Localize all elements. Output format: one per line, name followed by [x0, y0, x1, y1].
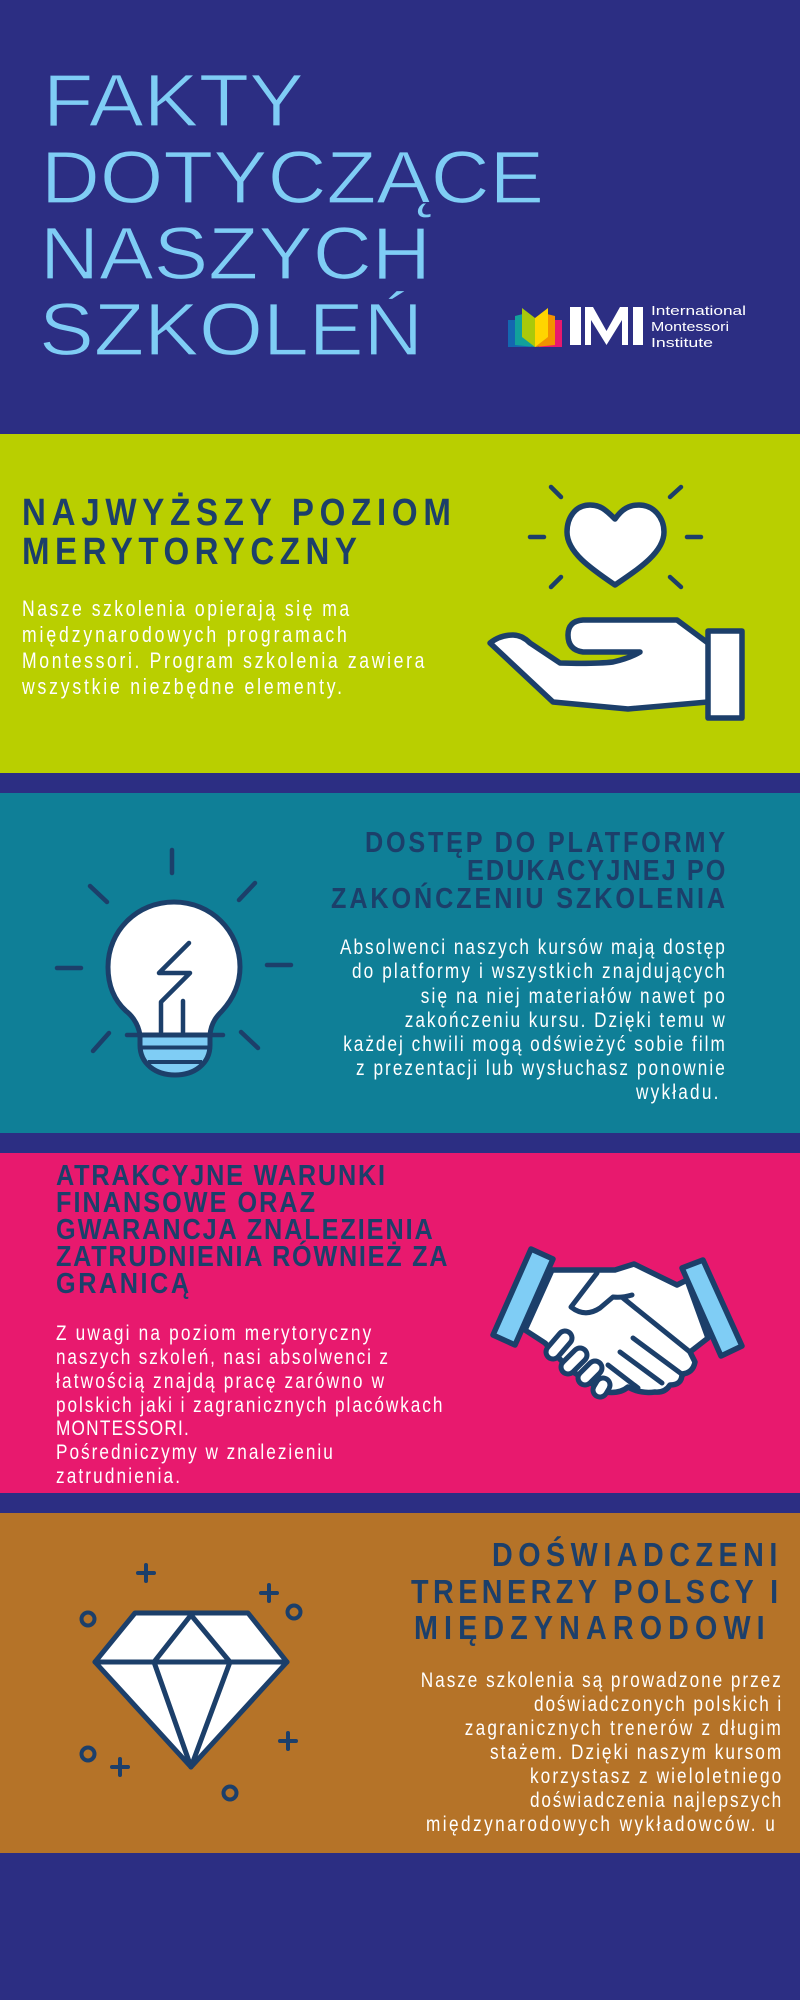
- heading: [331, 825, 725, 914]
- text block: doświadczenia najlepszych: [530, 1788, 781, 1813]
- text block: każdej chwili mogą odświeżyć sobie film: [343, 1032, 725, 1057]
- text block: wszystkie niezbędne elementy.: [21, 675, 342, 700]
- heading: FINANSOWE ORAZ: [56, 1185, 315, 1218]
- logo wordmark IMI: [570, 307, 643, 345]
- heading: ATRAKCYJNE WARUNKI: [56, 1158, 385, 1191]
- text block: MONTESSORI.: [56, 1416, 189, 1441]
- heading: [411, 1535, 778, 1646]
- text block: Pośredniczymy w znalezieniu: [56, 1440, 333, 1465]
- text block: Montessori. Program szkolenia zawiera: [22, 649, 425, 674]
- text block: Z uwagi na poziom merytoryczny: [56, 1321, 371, 1346]
- title: DOTYCZĄCE: [41, 136, 544, 219]
- logo text: [651, 303, 746, 350]
- logo: International Montessori Institute: [508, 303, 746, 350]
- icon: coloured book: [508, 308, 562, 347]
- heading: GWARANCJA ZNALEZIENIA: [56, 1212, 433, 1245]
- heading: EDUKACYJNEJ PO: [467, 853, 725, 886]
- icon: light bulb: [57, 850, 291, 1075]
- text block: łatwością znajdą pracę zarówno w: [56, 1369, 385, 1394]
- heading: NAJWYŻSZY POZIOM: [22, 491, 451, 534]
- logo text: International: [651, 303, 746, 318]
- text block: polskich jaki i zagranicznych placówkach: [56, 1393, 442, 1418]
- text block: wykładu.: [635, 1080, 718, 1105]
- text block: zakończeniu kursu. Dzięki temu w: [405, 1008, 726, 1033]
- panel: najwyższy poziom merytoryczny: [0, 434, 800, 773]
- text block: [340, 935, 726, 1105]
- heading: [56, 1158, 448, 1299]
- panel: doświadczeni trenerzy: [0, 1513, 800, 1853]
- heading: [22, 491, 451, 573]
- fingers: [553, 1338, 603, 1390]
- text block: do platformy i wszystkich znajdujących: [352, 959, 725, 984]
- title: SZKOLEŃ: [39, 288, 423, 371]
- heading: TRENERZY POLSCY I: [411, 1573, 778, 1610]
- text block: [421, 1668, 781, 1837]
- text block: zatrudnienia.: [56, 1464, 180, 1489]
- text block: [56, 1321, 442, 1489]
- text block: zagranicznych trenerów z długim: [465, 1716, 781, 1741]
- text block: Absolwenci naszych kursów mają dostęp: [340, 935, 725, 960]
- text block: stażem. Dzięki naszym kursom: [490, 1740, 781, 1765]
- icon: heart over hand: [490, 487, 742, 718]
- text block: międzynarodowych programach: [22, 623, 347, 648]
- icon: diamond: [82, 1565, 300, 1800]
- heading: ZAKOŃCZENIU SZKOLENIA: [331, 881, 725, 914]
- title: NASZYCH: [40, 212, 431, 295]
- text block: z prezentacji lub wysłuchasz ponownie: [356, 1056, 725, 1081]
- text block: [21, 597, 425, 700]
- logo text: Montessori: [651, 319, 729, 334]
- heading: DOSTĘP DO PLATFORMY: [365, 825, 725, 858]
- heading: GRANICĄ: [56, 1266, 189, 1299]
- title: [39, 59, 544, 371]
- text block: międzynarodowych wykładowców. u: [426, 1812, 775, 1837]
- icon: handshake: [493, 1249, 742, 1392]
- heading: DOŚWIADCZENI: [492, 1535, 777, 1573]
- text block: korzystasz z wieloletniego: [530, 1764, 781, 1789]
- heading: MIĘDZYNARODOWI: [414, 1609, 765, 1646]
- text block: doświadczonych polskich i: [534, 1692, 781, 1717]
- heading: ZATRUDNIENIA RÓWNIEŻ ZA: [56, 1239, 448, 1272]
- text block: Nasze szkolenia są prowadzone przez: [421, 1668, 781, 1693]
- panel: atrakcyjne warunki finansowe: [0, 1153, 800, 1493]
- panel: dostęp do platformy: [0, 793, 800, 1133]
- title: FAKTY: [43, 59, 304, 142]
- text block: naszych szkoleń, nasi absolwenci z: [56, 1345, 388, 1370]
- text block: się na niej materiałów nawet po: [421, 984, 725, 1009]
- text block: Nasze szkolenia opierają się ma: [22, 597, 350, 622]
- logo text: Institute: [651, 335, 713, 350]
- heading: MERYTORYCZNY: [22, 530, 357, 573]
